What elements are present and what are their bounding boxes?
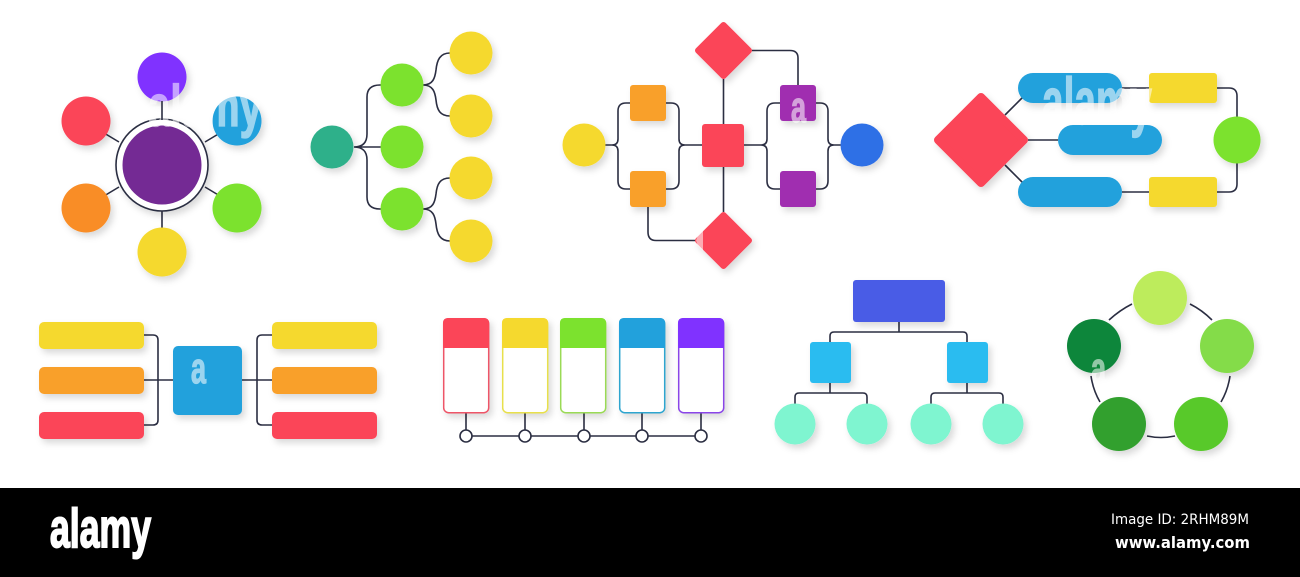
red diamond bbox=[938, 97, 1024, 183]
panel: green cycle bbox=[1067, 271, 1254, 451]
timeline dots bbox=[460, 430, 707, 442]
watermark: a bbox=[791, 83, 806, 132]
panel: decision flow with pills bbox=[938, 73, 1260, 207]
red card bbox=[443, 318, 489, 413]
panel: timeline cards bbox=[443, 318, 724, 442]
yellow card bbox=[502, 318, 548, 413]
purple card bbox=[678, 318, 724, 413]
yellow node bbox=[138, 228, 186, 276]
image id: Image ID: 2RHM89M bbox=[1111, 512, 1249, 528]
website: www.alamy.com bbox=[1115, 533, 1250, 552]
blue node bbox=[212, 96, 262, 146]
footer bar bbox=[0, 488, 1300, 577]
green circle bbox=[1214, 116, 1260, 164]
cycle nodes bbox=[1067, 271, 1254, 451]
decision diamonds bbox=[698, 25, 749, 266]
red node bbox=[62, 96, 110, 146]
bottom circles bbox=[774, 404, 1024, 444]
start circle bbox=[562, 124, 606, 166]
panel: process flowchart bbox=[562, 25, 884, 266]
yellow boxes bbox=[1149, 73, 1217, 207]
green node bbox=[212, 184, 262, 232]
green card bbox=[560, 318, 606, 413]
orange node bbox=[62, 184, 110, 232]
watermark: a bbox=[191, 344, 206, 393]
watermark: alamy bbox=[1042, 64, 1152, 138]
purple steps bbox=[780, 85, 816, 207]
blue pills bbox=[1018, 73, 1162, 207]
orange steps bbox=[630, 85, 666, 207]
watermark: a bbox=[1091, 344, 1106, 393]
top box bbox=[853, 280, 945, 322]
panel: org chart bbox=[774, 280, 1024, 444]
right bars bbox=[272, 322, 377, 439]
middle boxes bbox=[810, 342, 988, 383]
connector lines above watermark bbox=[162, 101, 1100, 402]
purple node bbox=[138, 52, 186, 102]
panel: two-sided bars bbox=[39, 322, 377, 439]
alamy logo: alamy bbox=[50, 497, 151, 559]
watermark bbox=[148, 64, 1152, 393]
blue card bbox=[619, 318, 665, 413]
central red step bbox=[702, 124, 744, 167]
panel: radial mind map bbox=[62, 52, 262, 276]
green branches bbox=[380, 64, 424, 230]
end circle bbox=[840, 124, 884, 166]
central hub bbox=[116, 119, 208, 211]
yellow leaves bbox=[450, 32, 492, 262]
left bars bbox=[39, 322, 144, 439]
panel: tree mind map bbox=[310, 32, 492, 262]
watermark: alamy bbox=[148, 74, 262, 139]
teal root bbox=[310, 126, 354, 168]
central blue square bbox=[173, 346, 242, 415]
